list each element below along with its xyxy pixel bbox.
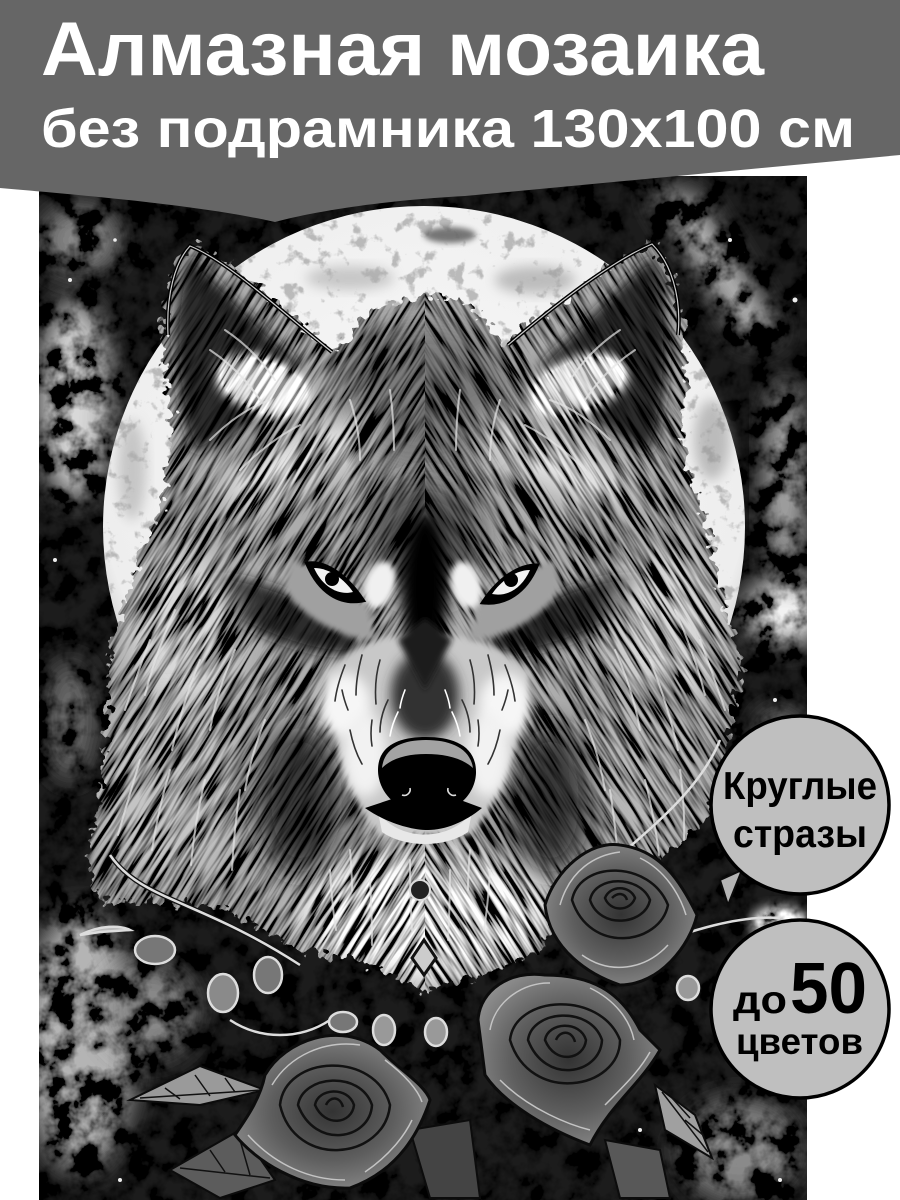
badge: up to 50 colours: 50: [790, 949, 867, 1029]
wolf head: [84, 238, 748, 996]
rose: upper right: [545, 844, 697, 985]
vines and buds: [80, 740, 780, 1046]
badge: round rhinestones: стразы: [733, 813, 867, 856]
nose and mouth: [365, 737, 482, 844]
left eye: [308, 564, 362, 601]
artwork: wolf and moon diamond painting: [39, 176, 807, 1200]
fur strands texture: [84, 238, 425, 996]
badge: up to 50 colours: цветов: [736, 1021, 863, 1062]
badge: round rhinestones: [711, 716, 889, 894]
ear rims: [168, 244, 679, 352]
muzzle: [319, 618, 531, 835]
leaves: [130, 870, 742, 1198]
pendant: [410, 880, 436, 975]
subtitle: без подрамника 130х100 см: [41, 99, 855, 159]
full moon: [103, 206, 745, 626]
eyes: [285, 558, 560, 640]
rose: lower left: [235, 1035, 430, 1188]
furry head silhouette with tone and strands: [84, 238, 748, 996]
night sky background: [24, 176, 825, 1200]
stars: [53, 238, 798, 1182]
title: Алмазная мозаика: [41, 7, 765, 92]
badge: round rhinestones: Круглые: [723, 765, 877, 808]
right eye: [484, 566, 536, 602]
header banner: [0, 0, 900, 222]
rose: lower right: [478, 974, 660, 1145]
badge: up to 50 colours: [711, 920, 889, 1098]
bright hair strands: [118, 330, 725, 945]
fur tone regions: [100, 255, 720, 980]
badge: up to 50 colours: до: [733, 979, 787, 1022]
